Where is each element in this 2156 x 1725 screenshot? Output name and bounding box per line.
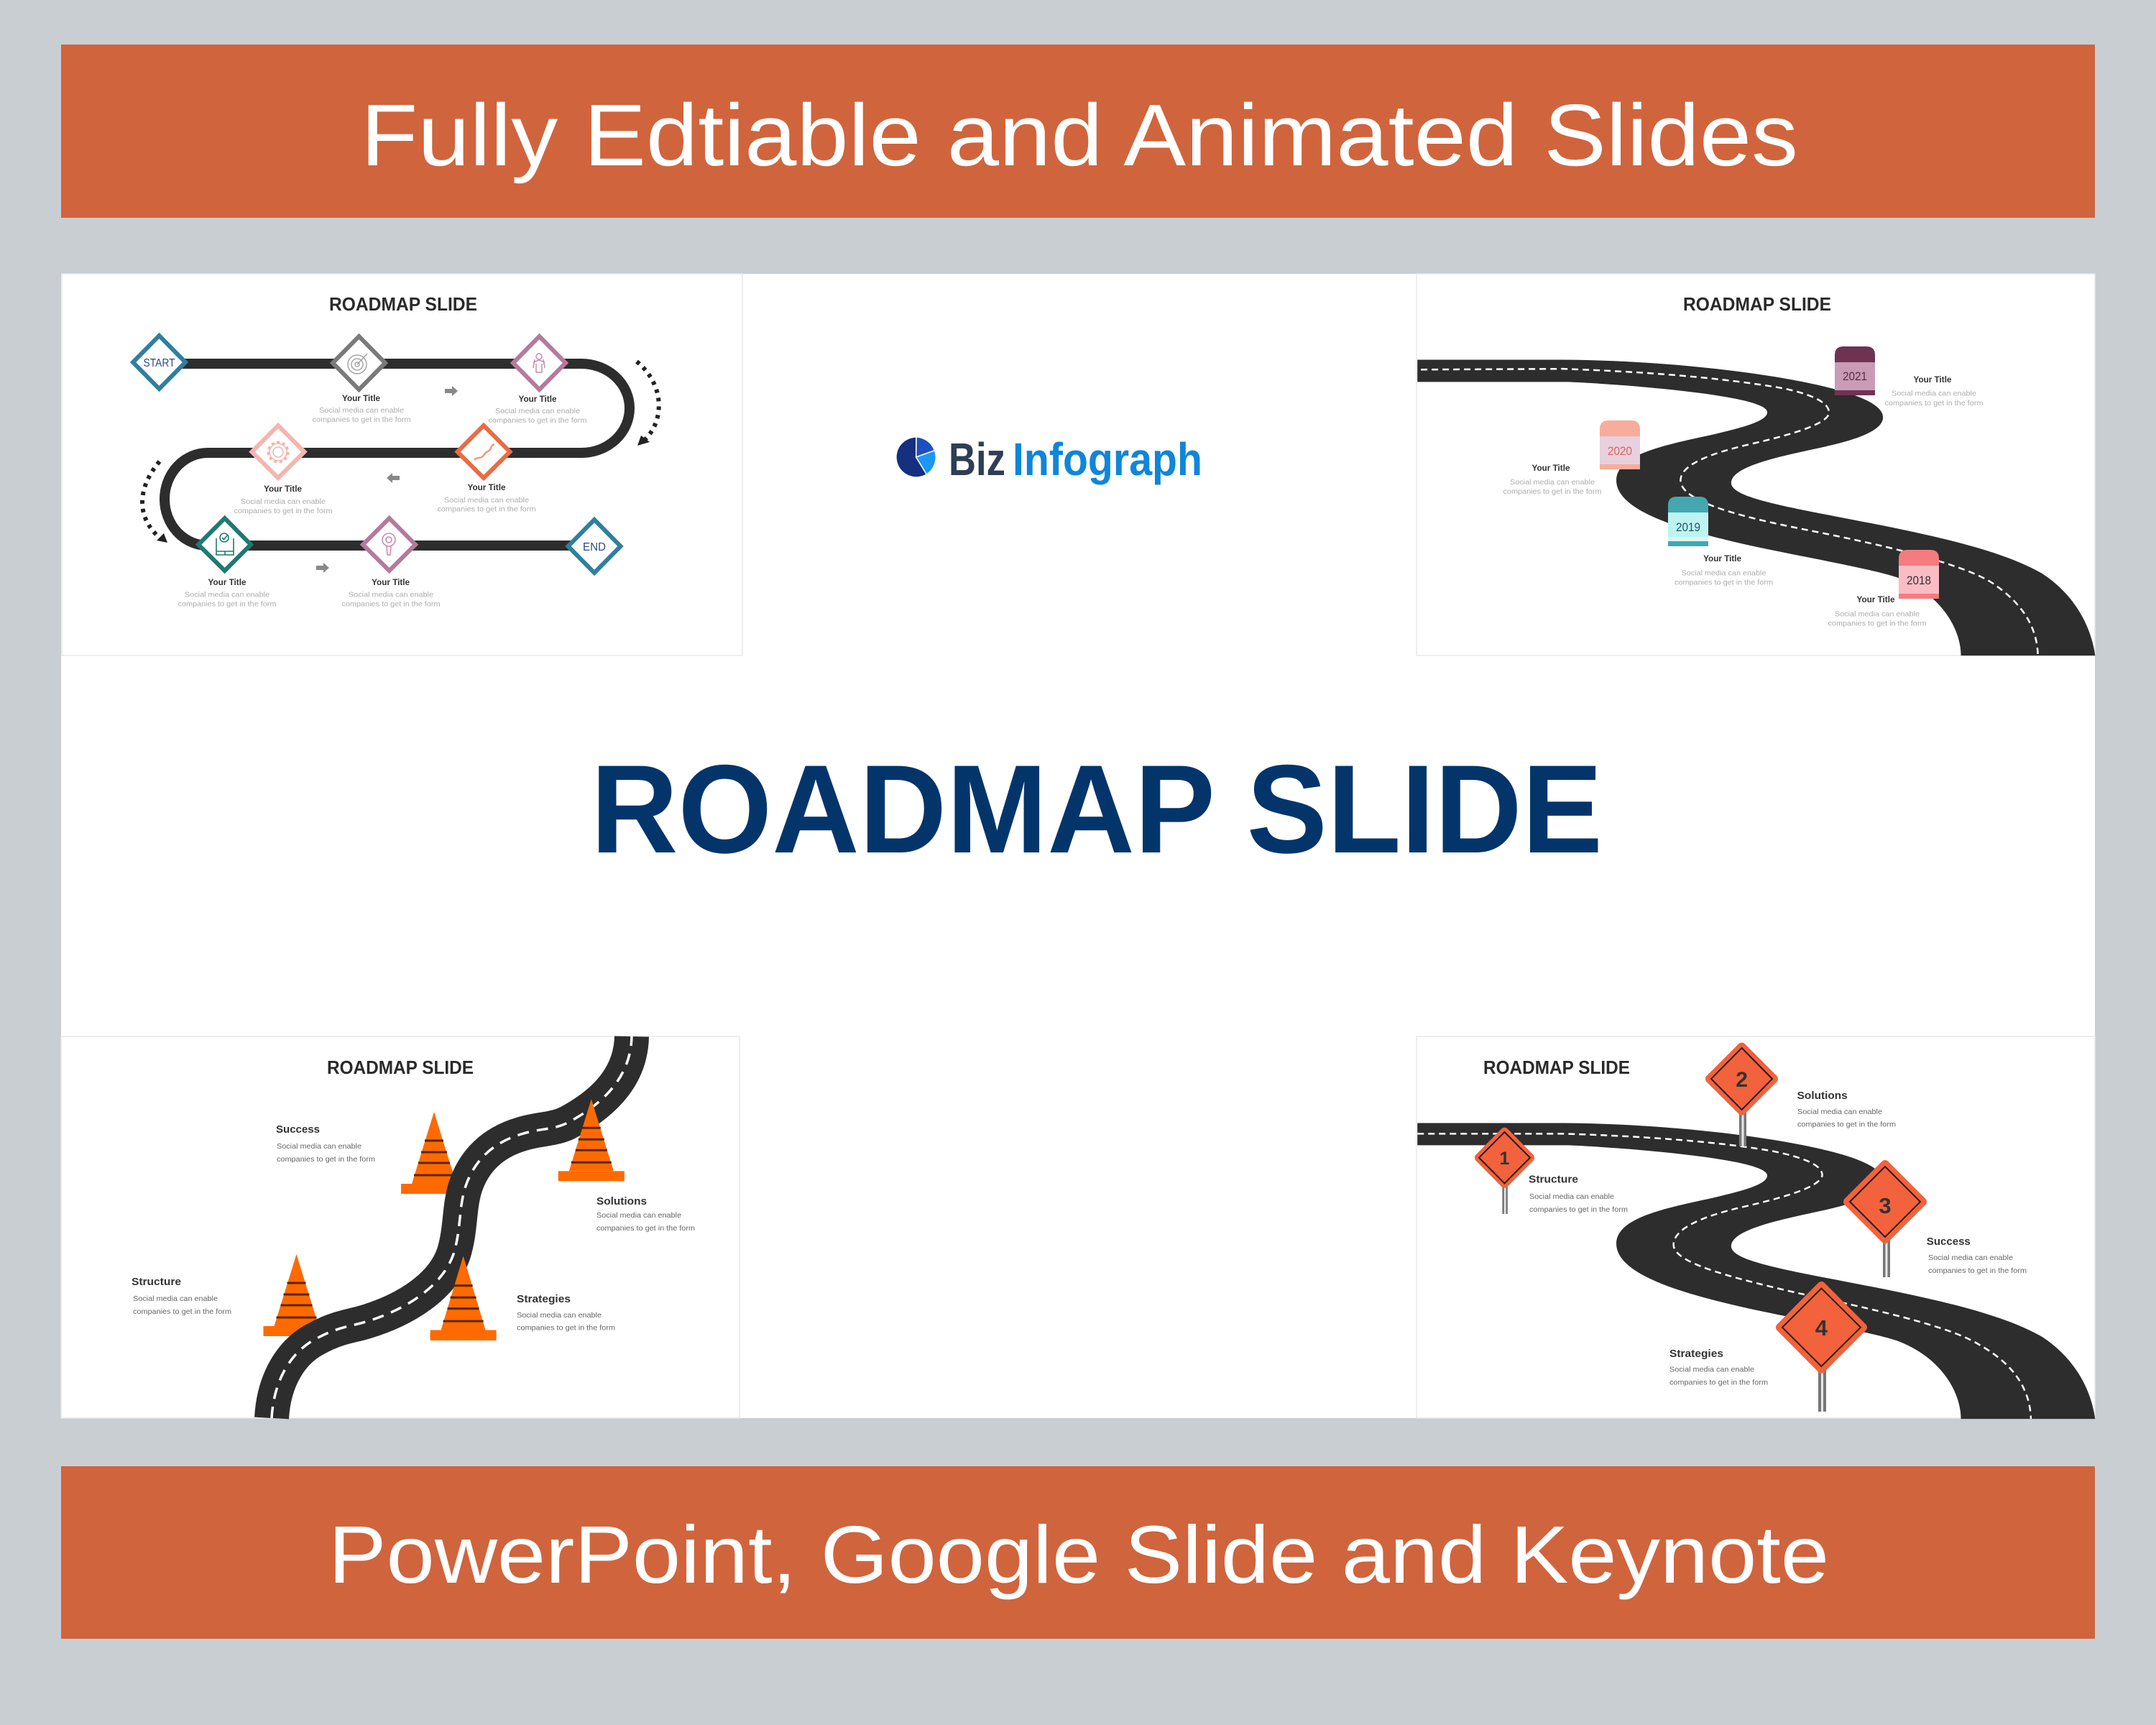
- marker 2019: 2019: [1676, 520, 1700, 534]
- caption: companies to get in the form: [312, 415, 411, 424]
- caption: companies to get in the form: [437, 505, 536, 513]
- text: structure: Structure: [132, 1276, 181, 1288]
- text: success: [276, 1123, 375, 1164]
- text: strategies: [517, 1293, 615, 1333]
- marker 2020: 2020: [1608, 444, 1632, 458]
- sign 3: 3: [1879, 1193, 1892, 1218]
- caption: [1503, 464, 1602, 496]
- text: solutions: Social media can enable: [1797, 1108, 1882, 1116]
- text: solutions: Social media can enable: [596, 1211, 681, 1220]
- marker 2020: [1600, 420, 1640, 469]
- caption: Your Title: [208, 579, 246, 587]
- caption: [1828, 596, 1927, 628]
- caption: companies to get in the form: [1503, 487, 1602, 496]
- cone: solutions: [558, 1099, 625, 1181]
- caption: companies to get in the form: [1828, 620, 1927, 628]
- bottom banner heading: PowerPoint, Google Slide and Keynote: [328, 1509, 1829, 1600]
- slide title: ROADMAP SLIDE: [1483, 1057, 1630, 1078]
- top banner heading: Fully Edtiable and Animated Slides: [361, 86, 1798, 184]
- caption: Social media can enable: [495, 407, 580, 415]
- direction arrow: [316, 563, 329, 573]
- sign 4: [1780, 1286, 1863, 1412]
- milestone: target: [333, 336, 385, 390]
- serpentine track: [159, 364, 630, 546]
- caption: Social media can enable: [1892, 390, 1976, 398]
- text: solutions: [1797, 1090, 1896, 1129]
- milestone: growth: [457, 426, 510, 478]
- sign 2: 2: [1736, 1068, 1748, 1092]
- text: success: Social media can enable: [1928, 1254, 2013, 1262]
- caption: Your Title: [1857, 596, 1894, 604]
- text: structure: companies to get in the form: [133, 1307, 231, 1316]
- text: success: [1927, 1236, 2027, 1275]
- text: solutions: companies to get in the form: [596, 1224, 695, 1233]
- caption: Social media can enable: [1835, 610, 1920, 618]
- caption: companies to get in the form: [1674, 579, 1773, 587]
- caption: [234, 485, 333, 515]
- text: structure: companies to get in the form: [1529, 1205, 1628, 1214]
- caption: Your Title: [1532, 464, 1570, 473]
- caption: [489, 395, 587, 425]
- caption: Social media can enable: [349, 591, 433, 599]
- direction arrow: [387, 473, 400, 483]
- end marker: END: [583, 541, 606, 553]
- cone: success: [401, 1112, 467, 1194]
- marker 2019: [1668, 497, 1708, 546]
- text: solutions: Solutions: [1797, 1090, 1848, 1102]
- text: strategies: Strategies: [1669, 1348, 1723, 1360]
- caption: Your Title: [1913, 376, 1952, 385]
- text: strategies: Social media can enable: [517, 1311, 602, 1320]
- central white panel: [61, 274, 2095, 1418]
- text: success: companies to get in the form: [1928, 1266, 2027, 1275]
- cone: structure: [263, 1254, 329, 1336]
- text: strategies: Strategies: [517, 1293, 571, 1305]
- marker 2018: [1899, 550, 1939, 599]
- caption: Social media can enable: [444, 496, 529, 505]
- sign 1: [1479, 1132, 1530, 1214]
- milestone: gear: [252, 426, 305, 478]
- dotted arrow right: [637, 362, 659, 446]
- caption: Social media can enable: [1682, 569, 1766, 578]
- winding road: [1417, 360, 2095, 656]
- text: success: Success: [1927, 1236, 1971, 1248]
- top banner: [61, 45, 2095, 218]
- caption: [1884, 376, 1984, 408]
- caption: [178, 579, 277, 608]
- caption: companies to get in the form: [489, 416, 587, 425]
- marker 2021: [1835, 346, 1875, 395]
- text: structure: [1529, 1173, 1628, 1214]
- text: structure: Structure: [1529, 1173, 1578, 1186]
- caption: companies to get in the form: [342, 599, 441, 608]
- caption: companies to get in the form: [1884, 399, 1984, 408]
- text: structure: [132, 1276, 231, 1316]
- caption: Social media can enable: [241, 497, 326, 506]
- text: success: Social media can enable: [277, 1142, 361, 1151]
- slide title: ROADMAP SLIDE: [329, 293, 477, 315]
- panel: winding road with diamond signs: [1416, 1036, 2095, 1419]
- dotted arrow left: [142, 461, 167, 543]
- logo wordmark Infograph: Infograph: [1013, 433, 1202, 485]
- text: strategies: Social media can enable: [1669, 1365, 1754, 1374]
- winding road: [1417, 1123, 2095, 1419]
- text: strategies: companies to get in the form: [1669, 1378, 1768, 1386]
- marker 2021: 2021: [1843, 369, 1867, 383]
- caption: [437, 484, 536, 513]
- S-curve road: [272, 1036, 632, 1418]
- caption: Your Title: [467, 484, 506, 492]
- sign 2: [1710, 1046, 1774, 1146]
- caption: Your Title: [519, 395, 556, 404]
- text: success: companies to get in the form: [277, 1155, 375, 1164]
- logo: [896, 433, 1202, 485]
- text: success: Success: [276, 1123, 320, 1136]
- panel: S-curve road with traffic cones: [61, 1036, 740, 1418]
- panel: serpentine roadmap slide: [62, 274, 742, 656]
- logo pie icon: [896, 437, 936, 477]
- caption: companies to get in the form: [178, 599, 277, 608]
- slide title: ROADMAP SLIDE: [327, 1057, 474, 1078]
- text: solutions: Solutions: [596, 1195, 647, 1208]
- milestone: team: [513, 336, 566, 390]
- start marker: START: [144, 357, 175, 369]
- text: structure: Social media can enable: [1529, 1192, 1614, 1201]
- caption: [1674, 555, 1773, 587]
- main heading: ROADMAP SLIDE: [591, 740, 1603, 880]
- caption: [312, 395, 411, 424]
- logo wordmark Biz: Biz: [949, 433, 1005, 485]
- caption: Social media can enable: [319, 406, 404, 415]
- caption: Social media can enable: [185, 591, 270, 599]
- milestone: idea bulb: [363, 518, 415, 571]
- direction arrow: [445, 386, 458, 396]
- caption: Your Title: [372, 579, 410, 587]
- sign 4: 4: [1815, 1315, 1828, 1340]
- sign 1: 1: [1500, 1149, 1510, 1169]
- caption: Social media can enable: [1510, 478, 1595, 487]
- text: strategies: [1669, 1348, 1768, 1386]
- end marker: [568, 520, 621, 573]
- milestone: checklist: [198, 518, 251, 571]
- sign 3: [1848, 1164, 1922, 1277]
- text: solutions: companies to get in the form: [1797, 1121, 1896, 1129]
- caption: companies to get in the form: [234, 507, 333, 515]
- caption: [342, 579, 441, 608]
- panel: winding road with year markers: [1416, 274, 2095, 656]
- text: strategies: companies to get in the form: [517, 1324, 615, 1333]
- marker 2018: 2018: [1907, 574, 1931, 587]
- text: solutions: [596, 1195, 695, 1233]
- slide title: ROADMAP SLIDE: [1683, 293, 1831, 315]
- caption: Your Title: [1703, 555, 1741, 564]
- bottom banner: [61, 1466, 2095, 1639]
- cone: strategies: [430, 1256, 497, 1340]
- caption: Your Title: [342, 395, 380, 403]
- start marker: [133, 336, 185, 389]
- caption: Your Title: [264, 485, 302, 494]
- text: structure: Social media can enable: [133, 1294, 218, 1303]
